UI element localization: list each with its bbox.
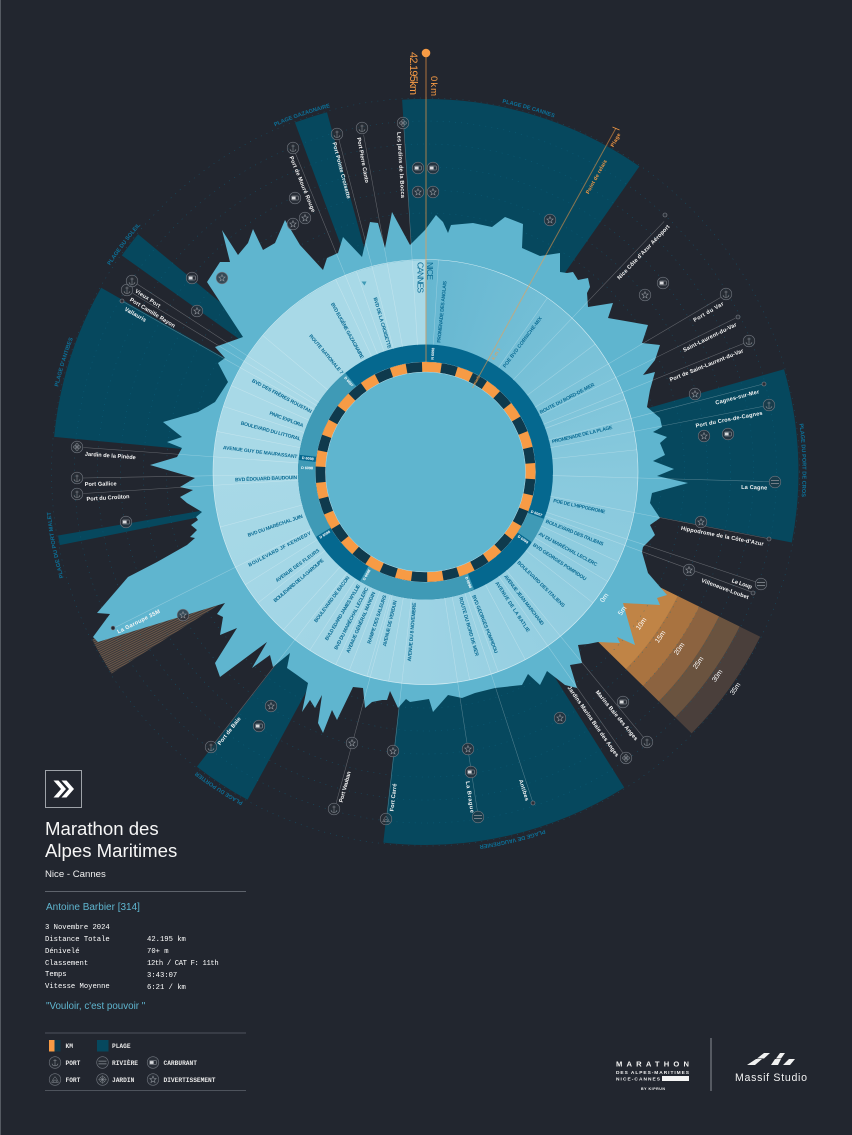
street labels: BOULEVARD DES ITALIENS [545, 519, 605, 548]
street dividers [217, 260, 637, 681]
title: Alpes Maritimes [45, 840, 177, 861]
road number tags: D 6098 [464, 576, 472, 589]
elevation profile silhouette [93, 212, 688, 733]
street labels [223, 280, 614, 662]
street labels: POE BVD CORNICHE-MIX [502, 315, 544, 369]
street labels: BVD ÉDOUARD BAUDOUIN [235, 473, 298, 483]
road number tags: D 6098 [301, 466, 313, 470]
point of interest labels: Port Pointe Croisette [331, 142, 351, 199]
point of interest labels: Marina Baie des Anges [594, 690, 638, 742]
point of interest labels: Port de Mouré Rouge [288, 156, 316, 213]
legend: beach swatch [97, 1040, 131, 1052]
street disc [213, 260, 638, 684]
beach sector: Plage de Cannes [402, 99, 639, 472]
beach labels: PLAGE DE CANNES [502, 99, 555, 118]
point of interest labels: Les jardins de la Bocca [395, 132, 405, 199]
street labels: POE DE L'HIPPODROME [553, 498, 606, 516]
point of interest labels: Port de Baie [217, 716, 243, 747]
icons: rivers [472, 476, 781, 823]
race stats: Vitesse Moyenne [45, 983, 110, 991]
city labels: Cannes and Nice: NICE [425, 262, 435, 280]
elevation scale labels: 25m [692, 655, 706, 671]
beach labels: PLAGE D'ANTIBES [54, 338, 72, 386]
race stats: Distance Totale [45, 936, 110, 944]
street labels: BOULEVARD DU LITTORAL [240, 421, 301, 442]
beach labels: PLAGE DU SOLEIL [107, 224, 140, 265]
point of interest labels: Fort Carré [389, 783, 399, 812]
kilometre ring [316, 362, 536, 582]
point of interest labels: La Brague [464, 781, 475, 813]
small marker triangle [362, 282, 366, 286]
road type ring [307, 353, 544, 591]
beach labels: PLAGE DU PORTIER [195, 772, 243, 806]
legend: entertainment [147, 1074, 216, 1085]
logo: Marathon des Alpes-Maritimes: MARATHON [616, 1060, 689, 1068]
point of interest labels: Villeneuve-Loubet [700, 578, 749, 601]
point of interest labels: Port Vauban [339, 770, 353, 803]
legend: fuel [147, 1057, 197, 1068]
point of interest labels: Nice Côte d'Azur Aéroport [617, 224, 671, 281]
street labels: BVD GEORGES POMPIDOU [470, 594, 499, 655]
beach labels: PLAGE DU PORT DE CROS [800, 424, 806, 497]
beach sector: Plage de Vaugrenier [383, 472, 624, 845]
street labels: RAMPE DES SALEURS [367, 594, 389, 645]
legend: river [97, 1057, 138, 1068]
street labels: AV DU MARÉCHAL LECLERC [537, 530, 599, 568]
race stats: Dénivelé [45, 948, 80, 956]
road number tags: D 6098 [517, 535, 529, 545]
beach sector: Plage d'Antibes [54, 288, 425, 472]
point of interest labels: Port Camille Rayon [128, 297, 176, 330]
logo: Marathon des Alpes-Maritimes: DES ALPES-MARITIMES [616, 1070, 690, 1076]
marker line: relay point and beach [472, 127, 623, 388]
logo: Massif Studio: Massif Studio [735, 1072, 807, 1084]
beach labels: PLAGE DE VAUGRENIER [480, 830, 546, 849]
beach labels [46, 99, 806, 849]
icon: chevrons in square [45, 770, 82, 808]
race stats: 3:43:07 [147, 972, 177, 980]
elevation scale labels: 5m [617, 605, 629, 617]
street labels: ROUTE DU BORD-DE-MER [539, 382, 596, 416]
race stats: Temps [45, 971, 67, 979]
legend: km swatch: KM [66, 1043, 73, 1050]
road number tags: D 6098 [302, 456, 314, 461]
legend: fuel: CARBURANT [164, 1060, 197, 1067]
street labels: AVENUE GÉNÉRAL MANGIN [344, 590, 377, 654]
point of interest labels: Jardin de la Pinède [85, 452, 136, 461]
beach labels: PLAGE GAZAGNAIRE [274, 104, 330, 126]
point of interest labels: Port Pierre Canto [355, 137, 369, 184]
race stats [45, 924, 218, 992]
street labels: AVENUE JEAN MARCHAND [502, 574, 545, 627]
hatched sector: La Garoupe [92, 472, 426, 674]
road number tags: D 6007 [530, 510, 543, 518]
icon: fort [380, 813, 392, 825]
street labels: BOULEVARD JF KENNEDY [247, 530, 313, 569]
marker line: relay point and beach: Km5 [472, 374, 481, 385]
race stats: 42.195 km [147, 936, 186, 944]
point of interest labels: Cagnes-sur-Mer [715, 389, 761, 407]
street labels: AVENUE GUY DE MAUPASSANT [223, 445, 298, 460]
point of interest labels: Port Gallice [85, 481, 117, 488]
road number tags: D 6098 [362, 569, 372, 581]
elevation scale labels: 0m [599, 592, 611, 604]
road number tags: N 6098 [431, 348, 435, 360]
legend: port [49, 1057, 81, 1068]
point of interest labels: Hippodrome de la Côte-d'Azur [680, 526, 765, 548]
race stats: Classement [45, 960, 88, 968]
city labels: Cannes and Nice [416, 262, 435, 293]
title [45, 818, 177, 861]
point of interest labels: Vieux Port [134, 289, 161, 310]
runner name: Antoine Barbier [314] [46, 902, 140, 913]
street labels: AVENUE DES FLEURS [275, 548, 322, 584]
beach sector: Plage du Soleil [122, 234, 426, 472]
small end dots [111, 213, 771, 805]
elevation scale labels [599, 592, 743, 697]
beach sector: Plage du Portier [197, 472, 426, 800]
street labels: AVENUE DE LA BATLIE [493, 581, 531, 634]
beach sector: Plage du Port de Cros [426, 369, 798, 542]
marker line: relay point and beach: Plage [610, 132, 623, 148]
marker line: start and finish: 0km [428, 76, 439, 96]
elevation scale wedge [426, 472, 760, 733]
subtitle: Nice - Cannes [45, 869, 106, 880]
marker line: start and finish: 42.195km [407, 52, 419, 95]
legend: fort [49, 1074, 81, 1085]
point of interest labels: Le Loup [731, 578, 753, 591]
legend [45, 1033, 246, 1090]
point of interest labels: Port du Croûton [86, 494, 130, 503]
dotted elevation rings [52, 98, 800, 846]
point of interest labels: Port du Cros-de-Cagnes [695, 411, 763, 430]
race stats: 6:21 / km [147, 984, 186, 992]
beach labels: PLAGE DU PORT MALET [46, 512, 64, 578]
street labels: AVENUE DU 8 NOVEMBRE [407, 602, 418, 662]
race stats: 12th / CAT F: 11th [147, 960, 218, 968]
elevation scale labels: 10m [635, 616, 649, 632]
street labels: PARC EXFLORA [268, 411, 304, 429]
street labels: BVD DES FRÈRES ROUSTAN [251, 376, 314, 415]
street labels: BVD EUGÈNE GAZAGNAIRE [329, 301, 367, 361]
legend: fort: FORT [66, 1077, 81, 1084]
point of interest labels: La Cagne [741, 485, 767, 492]
point of interest labels: La Garoupe 35M [117, 609, 162, 635]
legend: beach swatch: PLAGE [112, 1043, 131, 1050]
icons: fuel stops [120, 162, 734, 778]
legend: garden: JARDIN [112, 1077, 135, 1084]
point of interest labels: Port de Saint-Laurent-du-Var [669, 348, 745, 383]
race stats: 3 Novembre 2024 [45, 924, 110, 932]
street labels: PROMENADE DE LA PLAGE [551, 425, 614, 445]
street labels: PROMENADE DES ANGLAIS [436, 280, 449, 343]
point of interest labels: Jardins Marina Baie des Anges [566, 685, 619, 758]
marker line: start and finish [407, 49, 439, 372]
quote: "Vouloir, c'est pouvoir " [46, 1001, 145, 1012]
road number tags: D 6007 [343, 376, 354, 388]
logo: Massif Studio [735, 1053, 807, 1084]
logo: Marathon des Alpes-Maritimes [616, 1060, 690, 1091]
icons: gardens [71, 117, 632, 764]
street labels: BVD DU MARÉCHAL JUIN [246, 512, 304, 539]
street labels: BOULEVARD DES ITALIENS [516, 560, 566, 609]
race stats: 70+ m [147, 948, 169, 956]
point of interest labels [85, 132, 767, 813]
title: Marathon des [45, 818, 159, 839]
point of interest labels: Port du Var [693, 301, 726, 324]
elevation scale labels: 15m [654, 629, 668, 645]
legend: port: PORT [66, 1060, 81, 1067]
street labels: BVD DE LA CROISETTE [372, 297, 392, 350]
elevation scale labels: 20m [673, 641, 687, 657]
logo: Marathon des Alpes-Maritimes: NICE-CANNES [616, 1076, 661, 1082]
point of interest labels: Vallauris [123, 307, 147, 324]
elevation scale labels: 30m [711, 668, 725, 684]
street labels: ROUTE DU BORD DE MER [457, 597, 480, 657]
divider between logos [710, 1038, 712, 1091]
point of interest labels: Saint-Laurent-du-Var [682, 322, 739, 354]
street labels: BOULEVARD DE BACON [313, 575, 352, 624]
icons: ports [71, 122, 775, 815]
lines to points of interest [83, 129, 769, 813]
legend: garden [97, 1074, 135, 1085]
elevation scale labels: 35m [729, 681, 743, 697]
legend: river: RIVIÈRE [112, 1060, 138, 1067]
legend: km swatch [49, 1040, 73, 1052]
street labels: ROUTE NATIONALE 7 [307, 334, 344, 376]
divider [45, 891, 246, 892]
road number tags [298, 345, 545, 591]
logo: Marathon des Alpes-Maritimes: BY KIPRUN [641, 1087, 665, 1091]
street labels: BOULEVARD DE LA GAROUPE [273, 558, 326, 604]
marker line: relay point and beach: Kms [491, 347, 503, 361]
point of interest labels: Antibes [517, 779, 529, 802]
icons: entertainment stars [177, 186, 710, 757]
road number tags: D 6098 [319, 530, 331, 540]
street labels: AVENUE DE VERDUN [382, 600, 399, 647]
beach sector: Plage Gazagnaire [295, 112, 426, 472]
legend: entertainment: DIVERTISSEMENT [164, 1077, 216, 1084]
city labels: Cannes and Nice: CANNES [416, 262, 426, 293]
street labels: BVD GEORGES POMPIDOU [531, 542, 587, 583]
street labels: BVLD EDARD JAMES WYLLIE [324, 583, 362, 642]
beach sector: Plage du Port Malet [58, 472, 426, 545]
marker line: relay point and beach: Point de relais [585, 159, 609, 195]
street labels: BVD DU MARÉCHAL LECLERC [332, 586, 370, 651]
